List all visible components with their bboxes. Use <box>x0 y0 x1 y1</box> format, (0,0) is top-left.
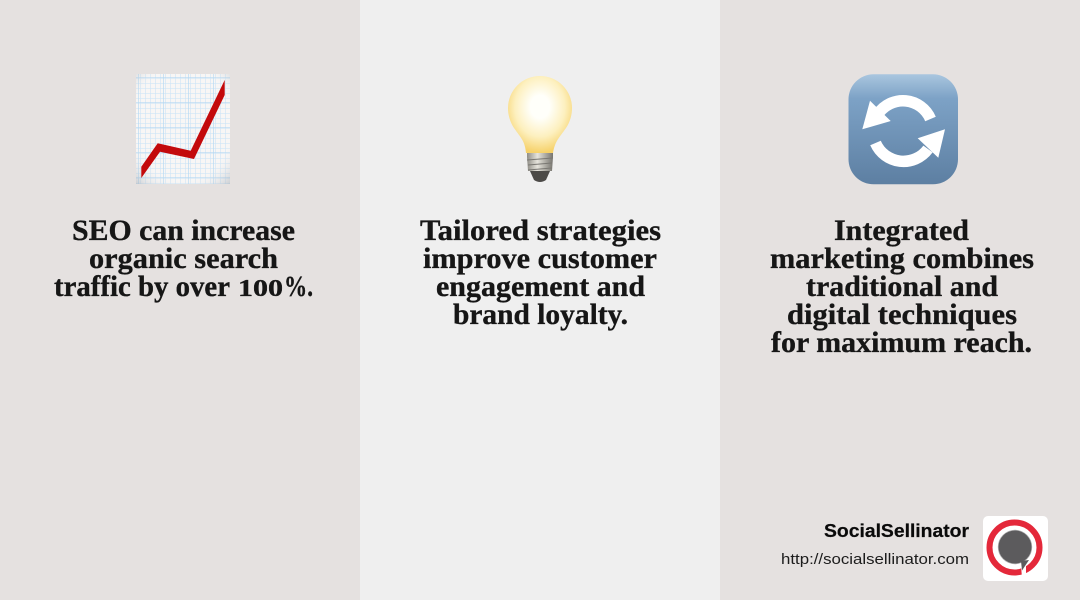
icon: light bulb <box>508 76 572 182</box>
heading: tailored strategies statement: Tailored strategies <box>420 214 661 247</box>
icon: chart trending up <box>136 74 230 184</box>
heading: SEO statement <box>54 214 313 303</box>
heading: integrated marketing statement: marketing combines <box>770 242 1034 275</box>
heading: integrated marketing statement: Integrated <box>834 214 969 247</box>
heading: integrated marketing statement: traditional and <box>806 270 998 303</box>
heading: integrated marketing statement: digital techniques <box>787 298 1017 331</box>
heading: integrated marketing statement <box>770 214 1034 359</box>
heading: tailored strategies statement: improve customer <box>423 242 657 275</box>
heading: SEO statement: SEO can increase <box>72 214 295 247</box>
footer: brand <box>781 516 1048 581</box>
brand url: http://socialsellinator.com <box>781 551 969 568</box>
brand name: SocialSellinator <box>824 521 969 541</box>
panel: SEO <box>0 0 360 600</box>
panel: integrated marketing <box>720 0 1080 600</box>
heading: tailored strategies statement <box>420 214 661 331</box>
heading: SEO statement: traffic by over <box>54 270 230 303</box>
heading: tailored strategies statement: engagement and <box>436 270 645 303</box>
heading: tailored strategies statement: brand loyalty. <box>453 298 628 331</box>
heading: integrated marketing statement: for maximum reach. <box>771 326 1032 359</box>
icon: refresh arrows <box>848 74 958 184</box>
heading: SEO statement: organic search <box>89 242 278 275</box>
icon: logo <box>983 516 1048 581</box>
heading: SEO statement: %. <box>284 270 313 303</box>
panel: tailored strategies <box>360 0 720 600</box>
heading: SEO statement: 100 <box>238 276 283 302</box>
